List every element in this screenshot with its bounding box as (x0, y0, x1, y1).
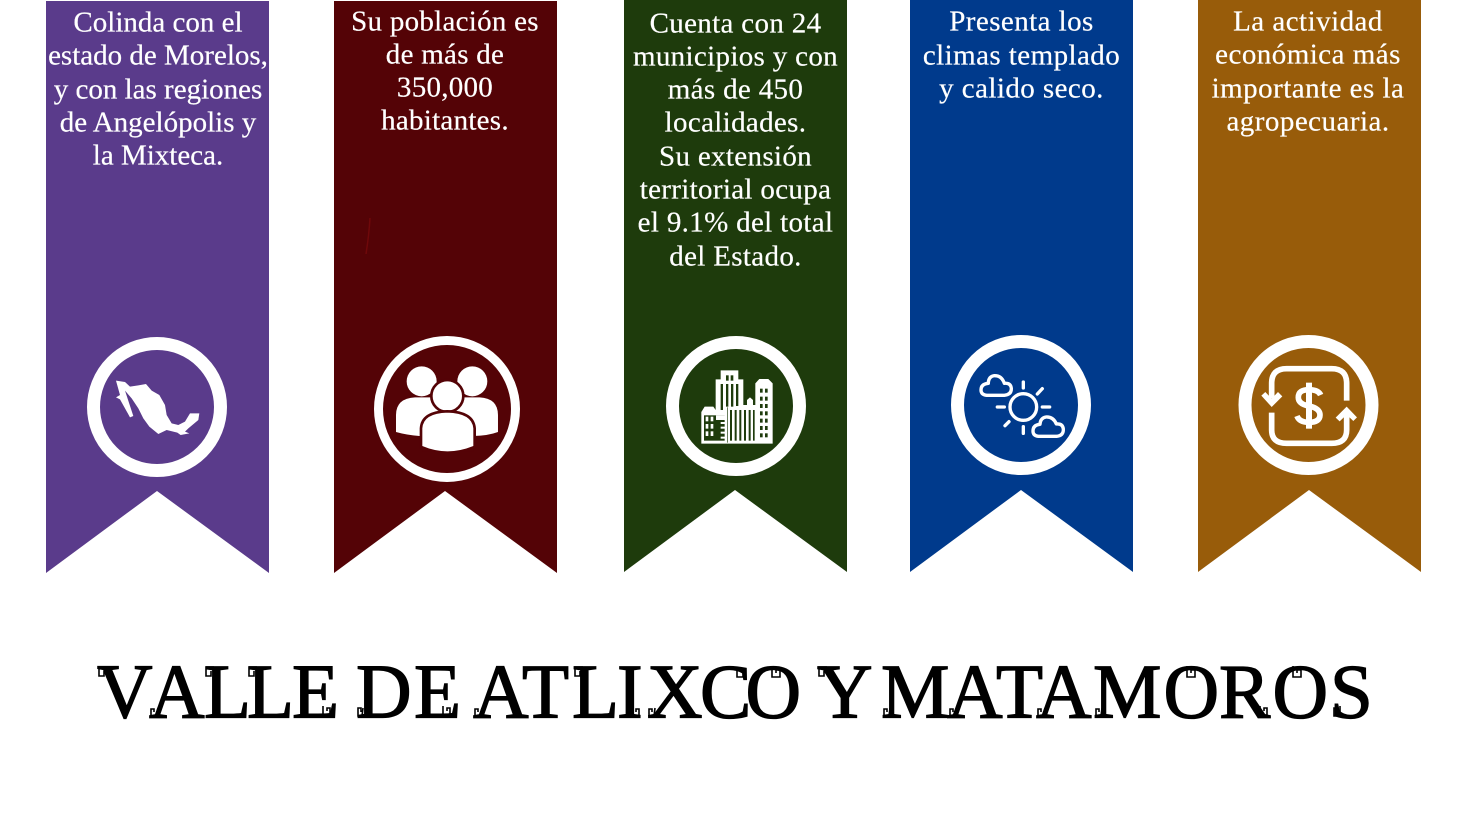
text: Colinda: de Angelópolis y (60, 106, 257, 138)
text: población: de más de (386, 38, 504, 70)
text: municipios: Cuenta con 24 (650, 8, 822, 40)
text: municipios: territorial ocupa (640, 174, 831, 206)
icon: sun and clouds (958, 342, 1084, 468)
icon: map of Mexico (94, 344, 220, 470)
ribbon: purple (46, 1, 269, 573)
title: VALLE DE ATLIXCO Y MATAMOROS (97, 648, 1373, 734)
text: Colinda: la Mixteca. (93, 140, 223, 172)
panel: población (334, 1, 557, 573)
panel: actividad económica (1198, 0, 1421, 572)
ribbon: brown (1198, 0, 1421, 572)
text: municipios (633, 8, 838, 272)
ribbon: green (624, 0, 847, 572)
text: municipios: municipios y con (633, 40, 838, 72)
text: climas: climas templado (923, 40, 1120, 72)
icon: money cycle (1245, 342, 1372, 468)
text: población: habitantes. (381, 104, 509, 136)
text: municipios: del Estado. (669, 240, 802, 272)
text: población (351, 6, 539, 136)
text: Colinda: y con las regiones (54, 74, 262, 106)
text: actividad económica (1212, 6, 1404, 138)
text: municipios: localidades. (665, 106, 806, 138)
panel: Colinda (46, 1, 269, 573)
text: climas: Presenta los (949, 6, 1094, 38)
text: actividad económica: agropecuaria. (1226, 106, 1390, 138)
text: Colinda: Colinda con el (73, 6, 243, 38)
text: municipios: Su extensión (659, 140, 812, 172)
ribbon: blue (910, 0, 1133, 572)
text: climas: y calido seco. (939, 72, 1104, 104)
ribbon: maroon (334, 1, 557, 573)
icon: buildings (672, 342, 800, 470)
icon: people (378, 340, 516, 478)
text: Colinda (48, 6, 268, 172)
panel: municipios (624, 0, 847, 572)
panel: climas (910, 0, 1133, 572)
text: población: 350,000 (397, 72, 493, 104)
text: climas (923, 6, 1120, 104)
text: Colinda: estado de Morelos, (48, 40, 268, 72)
text: población: Su población es (351, 6, 539, 38)
text: actividad económica: La actividad (1233, 6, 1383, 38)
text: actividad económica: económica más (1215, 38, 1401, 70)
text: actividad económica: importante es la (1212, 72, 1404, 104)
text: municipios: el 9.1% del total (638, 206, 833, 238)
text: municipios: más de 450 (668, 74, 803, 106)
